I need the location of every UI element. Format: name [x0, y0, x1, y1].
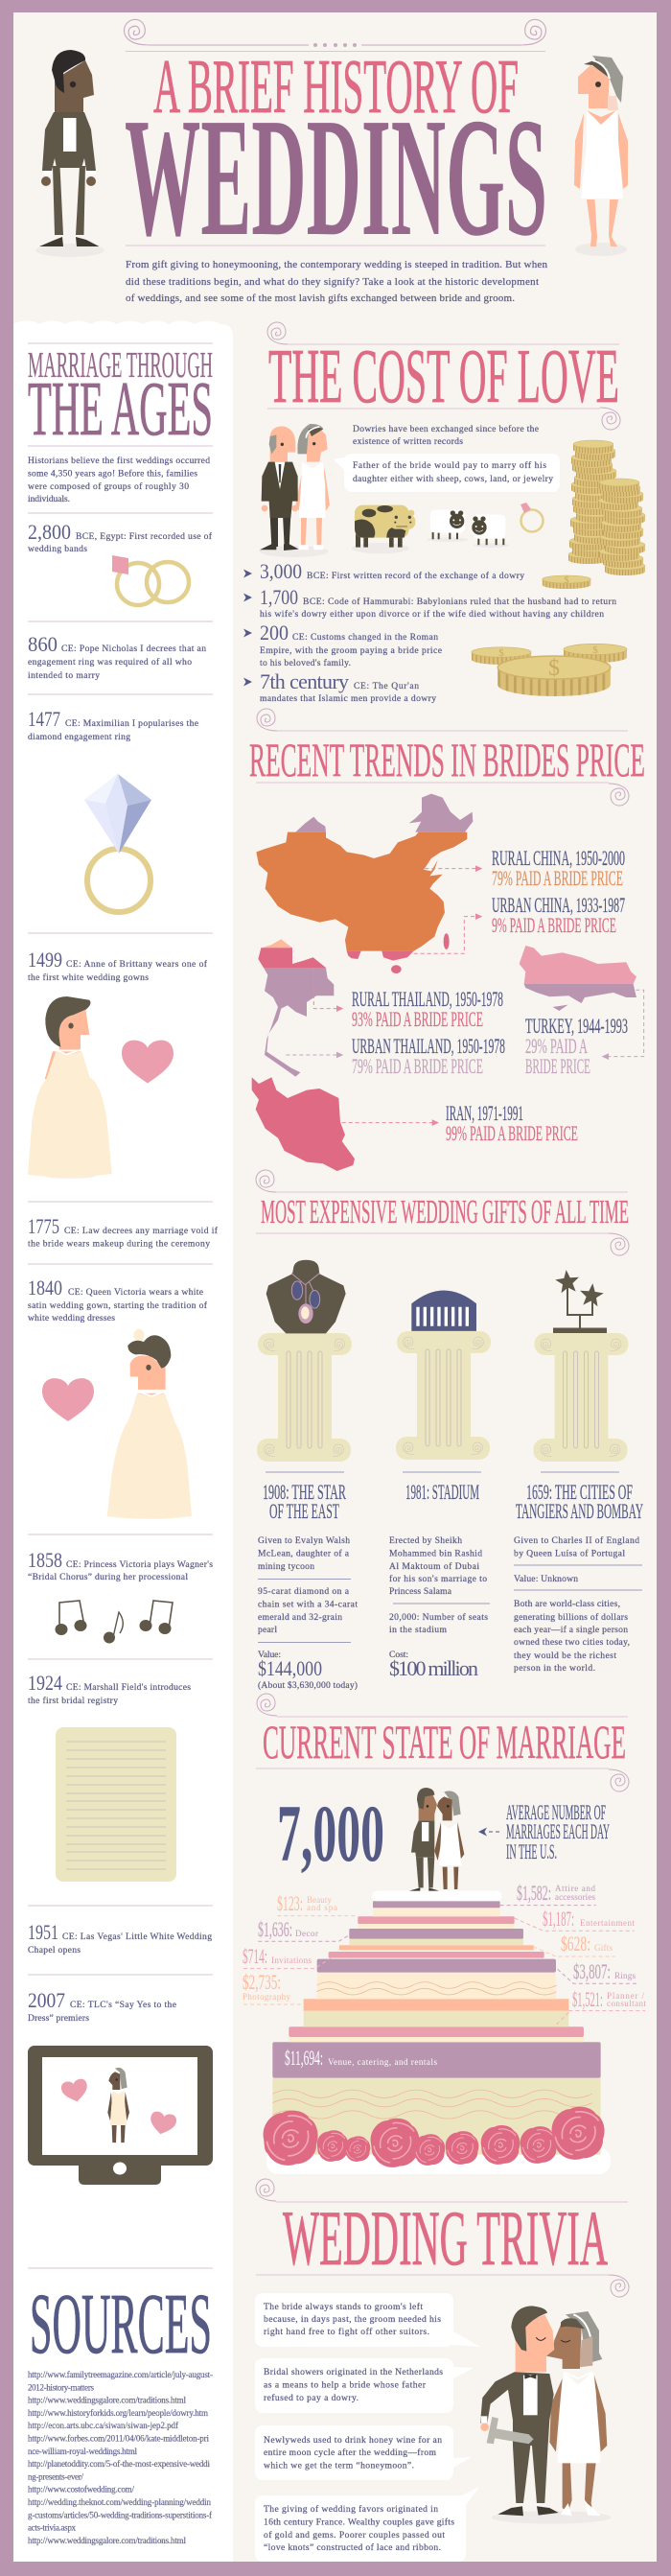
- bubble: bridal showers: [255, 2358, 474, 2413]
- text: tangiers and bombay: each year—if a single person: [514, 1625, 628, 1635]
- bubble: honeymoon: [255, 2425, 472, 2480]
- icon: coin stacks: $: [564, 575, 569, 586]
- bubble: wedding favors: 16th century France. Wealthy couples gave gifts: [264, 2517, 454, 2528]
- sources list: g-customs/articles/50-wedding-traditions-superstitions-f: [28, 2510, 212, 2519]
- entry: 1840 CE: CE: Queen Victoria wears a white: [68, 1287, 203, 1298]
- text: star of the east: mining tycoon: [258, 1561, 314, 1572]
- icon: heart: [122, 1041, 174, 1084]
- icon: necklace on bust: [266, 1260, 346, 1333]
- timeline: dowry history: 3,000: [260, 559, 302, 583]
- cost labels: Venue, catering, and rentals: [328, 2057, 437, 2067]
- heading: the ages: THE AGES: [28, 365, 213, 452]
- entry: 2800 BCE: wedding bands: [28, 544, 87, 554]
- timeline: dowry history: CE: The Qur'an: [354, 681, 419, 691]
- text: star of the east: chain set with a 34-carat: [258, 1600, 358, 1610]
- entry: 2800 BCE: BCE, Egypt: First recorded use of: [76, 531, 213, 542]
- icon: bride in gown: [28, 996, 112, 1179]
- map: thailand: [258, 939, 343, 1077]
- labels: thailand: RURAL THAILAND, 1950-1978: [352, 987, 503, 1011]
- intro text: [126, 259, 548, 304]
- labels: turkey: [525, 1014, 628, 1078]
- text: star of the east: Given to Evalyn Walsh: [258, 1535, 350, 1546]
- bubble: honeymoon: entire moon cycle after the wedding—from: [264, 2447, 437, 2458]
- text: tangiers and bombay: owned these two cities today,: [514, 1637, 630, 1648]
- intro paragraph: some 4,350 years ago! Before this, families: [28, 468, 197, 480]
- cost labels: $1,636:: [258, 1917, 292, 1941]
- entry: 1775 CE: [28, 1214, 219, 1249]
- sources list: http://wedding.theknot.com/wedding-planning/weddin: [28, 2497, 211, 2507]
- labels: thailand: [352, 987, 505, 1078]
- entry: 860 CE: intended to marry: [28, 670, 100, 681]
- cost labels: Planner /: [607, 1991, 644, 2001]
- cake roses: [264, 2107, 605, 2167]
- entry: 1775 CE: CE: Law decrees any marriage void if: [64, 1226, 219, 1236]
- bubble: honeymoon: which we get the term “honeymoon”.: [264, 2461, 414, 2471]
- entry: 1499 CE: CE: Anne of Brittany wears one of: [66, 959, 208, 970]
- bride: [546, 2311, 607, 2516]
- bubble: bride stands left: right hand free to fight off other suitors.: [264, 2327, 429, 2337]
- entry: 1775 CE: the bride wears makeup during the ceremony: [28, 1239, 210, 1249]
- arrow and caption: average marriages: [478, 1800, 610, 1863]
- chart: wedding cake of costs: [243, 1881, 646, 2174]
- text: star of the east: Value:: [258, 1650, 281, 1660]
- bubble: wedding favors: of gold and gems. Poorer couples passed out: [264, 2530, 445, 2541]
- entry: 1477 CE: CE: Maximilian I popularises the: [65, 718, 198, 729]
- sources list: 2012-history-matters: [28, 2382, 94, 2392]
- speech bubble: father of the bride: Father of the bride would pay to marry off his: [353, 460, 546, 471]
- entry: 1858 CE: 1858: [28, 1548, 62, 1572]
- entry: 1840 CE: satin wedding gown, starting the tradition of: [28, 1300, 208, 1311]
- text: star of the east: pearl: [258, 1625, 277, 1635]
- cost labels: [243, 1881, 646, 2070]
- text: dowries: existence of written records: [353, 436, 463, 447]
- text: star of the east: 95-carat diamond on a: [258, 1586, 350, 1597]
- text: stadium: in the stadium: [389, 1625, 448, 1635]
- timeline: dowry history: 7th century: [260, 669, 349, 693]
- entry: 1951 CE: [28, 1920, 212, 1955]
- entry: 1477 CE: [28, 707, 198, 742]
- entry: 1840 CE: 1840: [28, 1276, 62, 1300]
- cost labels: Attire and: [555, 1884, 596, 1893]
- text: stadium: 20,000: Number of seats: [389, 1612, 488, 1623]
- entry: 1499 CE: 1499: [28, 948, 62, 972]
- section: wedding trivia: [255, 2179, 629, 2562]
- entry: 1858 CE: CE: Princess Victoria plays Wagner's: [66, 1559, 213, 1570]
- icon: music notes: [56, 1601, 173, 1644]
- text: stadium: Princess Salama: [389, 1586, 452, 1597]
- text: star of the east: [258, 1472, 358, 1691]
- icon: bride: [574, 56, 628, 256]
- labels: thailand: 93% PAID A BRIDE PRICE: [352, 1007, 483, 1031]
- speech bubble: father of the bride: daughter either with sheep, cows, land, or jewelry: [353, 474, 553, 484]
- text: stadium: Al Maktoum of Dubai: [389, 1561, 479, 1572]
- bubble: bridal showers: as a means to help a bride whose father: [264, 2380, 427, 2391]
- panel: marriage through the ages: MARRIAGE THROUGH: [28, 345, 213, 386]
- cost labels: $123:: [277, 1891, 303, 1915]
- icon: ring: [521, 503, 543, 531]
- labels: iran: [446, 1101, 578, 1145]
- map: turkey: [520, 946, 644, 1060]
- speech bubble: father of the bride: [334, 454, 560, 492]
- bubble: bridal showers: Bridal showers originated in the Netherlands: [264, 2367, 443, 2377]
- timeline: dowry history: BCE: Code of Hammurabi: Babylonians ruled that the husband had to return: [303, 597, 616, 607]
- panel: marriage through the ages: SOURCES: [30, 2277, 212, 2372]
- cost labels: $628:: [561, 1932, 590, 1955]
- cost labels: $1,521:: [572, 1987, 603, 2011]
- entry: 1499 CE: the first white wedding gowns: [28, 972, 149, 983]
- cost labels: $3,807:: [573, 1959, 611, 1983]
- entry: 1840 CE: [28, 1276, 208, 1323]
- timeline: dowry history: to his beloved's family.: [260, 658, 351, 668]
- panel: marriage through the ages: [13, 321, 233, 2562]
- entry: 2007 CE: [28, 1988, 176, 2024]
- text: tangiers and bombay: by Queen Luísa of Portugal: [514, 1548, 625, 1559]
- icon: coin stacks: [543, 440, 645, 589]
- icon: diamond ring: [84, 774, 151, 912]
- intro paragraph: Historians believe the first weddings occurred: [28, 456, 210, 466]
- entry: 860 CE: 860: [28, 632, 58, 656]
- bubble: bride stands left: The bride always stands to groom's left: [264, 2302, 423, 2312]
- text: tangiers and bombay: Both are world-class cities,: [514, 1599, 620, 1609]
- icon: groom: [35, 50, 104, 257]
- entry: 1951 CE: CE: Las Vegas' Little White Wedding: [62, 1932, 212, 1942]
- text: dowries: [353, 424, 539, 447]
- entry: 1499 CE: [28, 948, 208, 983]
- intro text: did these traditions begin, and what do they signify? Take a look at the historic development: [126, 276, 539, 288]
- timeline: dowry history: [243, 559, 616, 704]
- entry: 860 CE: CE: Pope Nicholas I decrees that an: [61, 644, 206, 654]
- text: tangiers and bombay: Value: Unknown: [514, 1574, 578, 1584]
- labels: turkey: BRIDE PRICE: [525, 1054, 590, 1078]
- section: recent trends in brides price: [249, 709, 645, 1171]
- arrow and caption: average marriages: IN THE U.S.: [506, 1839, 557, 1863]
- text: star of the east: $144,000: [258, 1656, 322, 1680]
- text: stadium: for his son's marriage to: [389, 1574, 487, 1584]
- intro paragraph: were composed of groups of roughly 30: [28, 481, 189, 492]
- text: tangiers and bombay: Given to Charles II of England: [514, 1535, 639, 1546]
- timeline: dowry history: Empire, with the groom paying a bride price: [260, 645, 442, 656]
- text: stadium: [389, 1472, 490, 1680]
- bubble: wedding favors: [255, 2487, 479, 2562]
- intro paragraph: individuals.: [28, 494, 70, 504]
- cost labels: $11,694:: [285, 2046, 323, 2070]
- groom: [480, 2306, 559, 2516]
- sources list: http://www.historyforkids.org/learn/people/dowry.htm: [28, 2408, 208, 2418]
- sources list: http://www.weddingsgalore.com/traditions.html: [28, 2536, 186, 2545]
- sources list: [28, 2370, 213, 2545]
- entry: 2800 BCE: 2,800: [28, 520, 71, 544]
- labels: thailand: URBAN THAILAND, 1950-1978: [352, 1034, 505, 1058]
- text: stadium: Cost:: [389, 1650, 408, 1660]
- bubble: honeymoon: Newlyweds used to drink honey wine for an: [264, 2435, 442, 2446]
- labels: turkey: 29% PAID A: [525, 1034, 588, 1058]
- entry: 1924 CE: the first bridal registry: [28, 1696, 118, 1706]
- bubble: bridal showers: refused to pay a dowry.: [264, 2393, 359, 2403]
- text: star of the east: emerald and 32-grain: [258, 1612, 342, 1623]
- bubble: bride stands left: because, in days past, the groom needed his: [264, 2314, 441, 2325]
- timeline: dowry history: 1,700: [260, 585, 298, 609]
- section: current state of marriage: [243, 1694, 646, 2174]
- icon: wedding bands: [112, 555, 189, 605]
- icon: stadium: [411, 1291, 476, 1331]
- icon: bridal registry paper: [56, 1727, 176, 1882]
- entry: 860 CE: [28, 632, 206, 681]
- section: the cost of love: [243, 322, 645, 704]
- doily: [266, 2148, 611, 2174]
- text: tangiers and bombay: person in the world.: [514, 1663, 595, 1674]
- text: star of the east: 1908: THE STAR: [263, 1480, 346, 1504]
- cost labels: Photography: [243, 1992, 291, 2002]
- map: iran: [252, 1077, 439, 1171]
- text: tangiers and bombay: [514, 1472, 643, 1674]
- cost labels: $714:: [243, 1944, 267, 1968]
- cost labels: $2,735:: [243, 1970, 281, 1994]
- cost labels: Gifts: [594, 1943, 613, 1953]
- icon: stars on stand: [553, 1269, 607, 1333]
- intro paragraph: [28, 456, 210, 504]
- bubble: bride stands left: [255, 2293, 480, 2347]
- entry: 1951 CE: 1951: [28, 1920, 58, 1944]
- entry: 1775 CE: 1775: [28, 1214, 59, 1238]
- entry: 1924 CE: 1924: [28, 1671, 62, 1695]
- sources list: nce-william-royal-weddings.html: [28, 2447, 137, 2456]
- icon: queen victoria: [107, 1329, 192, 1519]
- entry: 2800 BCE: [28, 520, 213, 554]
- intro text: of weddings, and see some of the most lavish gifts exchanged between bride and groom.: [126, 293, 515, 304]
- gift 2: stadium: [389, 1291, 491, 1680]
- statistic: 7000: 7,000: [277, 1789, 384, 1879]
- cost labels: and spa: [307, 1903, 337, 1912]
- timeline: dowry history: CE: Customs changed in the Roman: [292, 632, 438, 643]
- entry: 1858 CE: “Bridal Chorus” during her processional: [28, 1572, 188, 1582]
- icon: father and bride: [260, 424, 330, 557]
- cost labels: consultant: [607, 1999, 646, 2008]
- icon: television: [28, 2046, 213, 2185]
- timeline: dowry history: 200: [260, 621, 289, 644]
- sources list: http://econ.arts.ubc.ca/siwan/siwan-jep2.pdf: [28, 2421, 178, 2430]
- icon: sheep: [427, 510, 510, 548]
- cost labels: Entertainment: [580, 1918, 635, 1928]
- labels: thailand: 79% PAID A BRIDE PRICE: [352, 1054, 483, 1078]
- cost labels: accessories: [555, 1892, 595, 1902]
- icon: cake topper couple: [409, 1788, 464, 1892]
- entry: 1951 CE: Chapel opens: [28, 1945, 81, 1955]
- icon: large coins: [472, 644, 627, 696]
- bubble: wedding favors: The giving of wedding favors originated in: [264, 2504, 438, 2515]
- entry: 2007 CE: CE: TLC's “Say Yes to the: [70, 2000, 176, 2010]
- cost labels: Beauty: [307, 1895, 332, 1905]
- bubble: wedding favors: “love knots” constructed of lace and ribbon.: [264, 2542, 441, 2553]
- text: stadium: Erected by Sheikh: [389, 1535, 462, 1546]
- text: stadium: Mohammed bin Rashid: [389, 1548, 482, 1559]
- icon: cow: [352, 505, 415, 553]
- entry: 1924 CE: [28, 1671, 191, 1706]
- labels: china: [492, 846, 625, 937]
- icon: large coins: $: [592, 644, 598, 656]
- labels: iran: IRAN, 1971-1991: [446, 1101, 523, 1125]
- sources list: http://planetoddity.com/5-of-the-most-expensive-weddi: [28, 2459, 210, 2469]
- gift 3: cities of tangiers and bombay: [514, 1269, 643, 1674]
- text: star of the east: (About $3,630,000 today): [258, 1680, 358, 1691]
- section: most expensive wedding gifts: [256, 1170, 643, 1691]
- icon: heart: [42, 1378, 94, 1421]
- text: star of the east: McLean, daughter of a: [258, 1548, 350, 1559]
- map: china: [256, 794, 482, 973]
- cost labels: $1,187:: [543, 1907, 574, 1931]
- text: stadium: 1981: STADIUM: [405, 1480, 479, 1504]
- entry: 1858 CE: [28, 1548, 213, 1582]
- cost labels: Decor: [295, 1929, 318, 1938]
- text: stadium: $100 million: [389, 1656, 478, 1680]
- entry: 1840 CE: white wedding dresses: [28, 1313, 115, 1323]
- cost labels: $1,582:: [517, 1881, 551, 1905]
- header: [35, 19, 628, 304]
- entry: 1477 CE: diamond engagement ring: [28, 732, 130, 742]
- icon: large coins: $: [498, 647, 504, 659]
- text: star of the east: OF THE EAST: [269, 1499, 339, 1523]
- text: tangiers and bombay: they would be the richest: [514, 1651, 616, 1661]
- timeline: dowry history: BCE: First written record of the exchange of a dowry: [307, 571, 524, 581]
- cost labels: Rings: [614, 1971, 636, 1980]
- timeline: dowry history: his wife's dowry either upon divorce or if the wife died without having any children: [260, 609, 604, 620]
- sources list: http://www.weddingsgalore.com/traditions.html: [28, 2396, 186, 2405]
- text: tangiers and bombay: generating billions of dollars: [514, 1612, 628, 1623]
- intro text: From gift giving to honeymooning, the contemporary wedding is steeped in tradition. But when: [126, 259, 548, 270]
- entry: 2007 CE: 2007: [28, 1988, 65, 2012]
- text: dowries: Dowries have been exchanged since before the: [353, 424, 539, 434]
- entry: 1477 CE: 1477: [28, 707, 60, 731]
- sources list: http://www.familytreemagazine.com/article/july-august-: [28, 2370, 213, 2379]
- sources list: http://www.forbes.com/2011/04/06/kate-middleton-pri: [28, 2434, 209, 2444]
- sources list: acts-trivia.aspx: [28, 2523, 77, 2533]
- gift 1: star of the east: [257, 1260, 358, 1691]
- entry: 860 CE: engagement ring was required of all who: [28, 657, 192, 667]
- sources list: ng-presents-ever/: [28, 2471, 83, 2481]
- icon: large coins: $: [548, 656, 560, 681]
- entry: 2007 CE: Dress” premiers: [28, 2013, 89, 2024]
- icon: kissing couple with sword: [480, 2306, 611, 2524]
- entry: 1924 CE: CE: Marshall Field's introduces: [66, 1682, 191, 1693]
- sources list: http://www.costofwedding.com/: [28, 2485, 134, 2494]
- timeline: dowry history: mandates that Islamic men provide a dowry: [260, 693, 436, 704]
- cost labels: Invitations: [271, 1955, 312, 1965]
